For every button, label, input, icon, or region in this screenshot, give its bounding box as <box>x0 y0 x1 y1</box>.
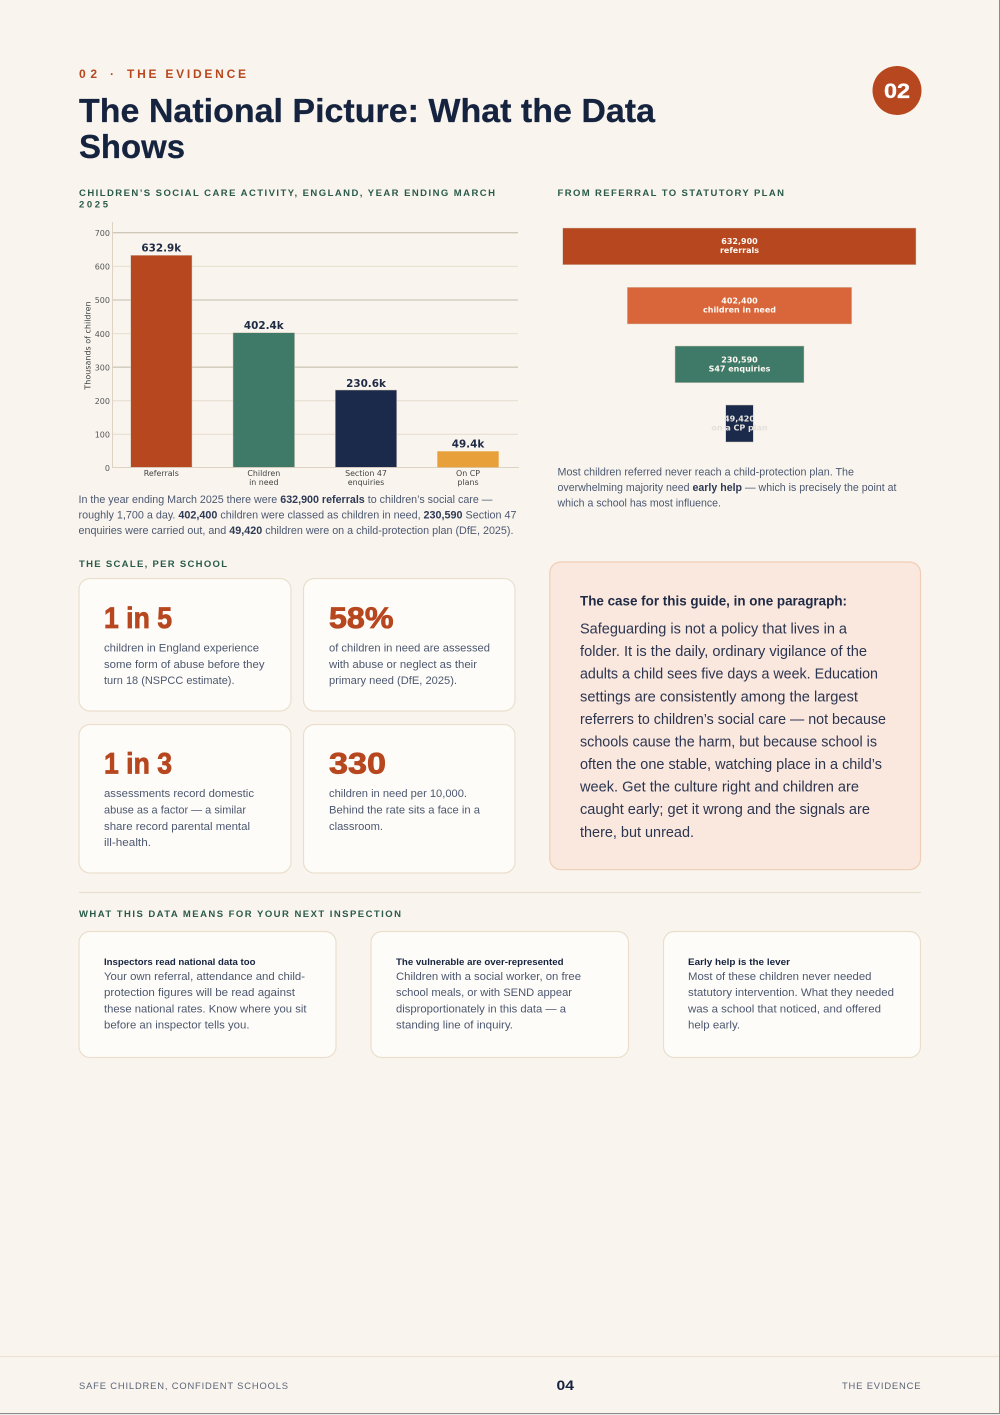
chapter badge: 02 <box>884 79 910 103</box>
funnel note: which a school has most influence. <box>557 498 721 510</box>
card: early help is the lever: Early help is the lever <box>688 957 790 968</box>
card: inspectors read national data: Inspectors read national data too <box>104 957 256 968</box>
stat card: 1 in 3: abuse as a factor — a similar <box>104 804 246 816</box>
stat card: 1 in 5: some form of abuse before they <box>104 659 265 671</box>
funnel note <box>557 466 897 510</box>
card: early help is the lever <box>664 932 920 1058</box>
funnel chart: 402,400 <box>721 296 758 306</box>
scale heading: THE SCALE, PER SCHOOL <box>79 559 227 570</box>
callout: the case for this guide <box>550 562 920 870</box>
bar chart: 402.4k <box>244 320 285 332</box>
bar chart caption: roughly 1,700 a day. 402,400 children were classed as children in need, 230,590 Section 47 <box>78 510 517 522</box>
stat card: 1 in 5: children in England experience <box>104 642 259 654</box>
card: the vulnerable are over-represented: disproportionately in this data — a <box>396 1003 566 1015</box>
bar chart caption: enquiries were carried out, and 49,420 children were on a child-protection plan (DfE, 2025). <box>78 525 514 537</box>
bar chart: Children <box>247 469 280 478</box>
stat card: 330: Behind the rate sits a face in a <box>329 804 480 816</box>
bar chart: 49.4k <box>452 438 485 450</box>
stat card: 330: classroom. <box>329 821 383 833</box>
funnel chart: referrals <box>720 246 759 255</box>
bar chart: 0 <box>105 464 110 473</box>
funnel heading: FROM REFERRAL TO STATUTORY PLAN <box>558 188 784 199</box>
stat card: 1 in 3 <box>79 724 291 873</box>
stat card: 58%: 58% <box>329 602 394 635</box>
card: early help is the lever: help early. <box>688 1020 740 1032</box>
stat card: 58% <box>304 578 515 711</box>
stat card: 1 in 5: 1 in 5 <box>104 602 172 635</box>
stat card: 330 <box>304 724 515 873</box>
card: inspectors read national data <box>79 932 336 1058</box>
bar chart: 632.9k <box>141 242 182 254</box>
inspection heading: WHAT THIS DATA MEANS FOR YOUR NEXT INSPECTION <box>79 909 401 920</box>
panel: funnel section <box>557 188 916 510</box>
callout paragraph: Safeguarding is not a policy that lives in a <box>580 622 848 638</box>
callout paragraph: adults a child sees five days a week. Education <box>580 667 878 683</box>
callout paragraph: caught early; get it wrong and the signals are <box>580 802 870 818</box>
stat card: 330: 330 <box>329 748 386 780</box>
bar chart caption <box>78 494 517 537</box>
panel: inspection implications <box>79 909 920 1058</box>
callout paragraph: folder. It is the daily, ordinary vigilance of the <box>580 644 867 660</box>
bar chart: 700 <box>95 229 110 238</box>
bar chart caption: In the year ending March 2025 there were 632,900 referrals to children’s social care — <box>78 494 493 506</box>
bar chart <box>84 222 519 487</box>
callout paragraph <box>579 622 886 841</box>
card: the vulnerable are over-represented: Children with a social worker, on free <box>396 971 581 983</box>
bar chart: enquiries <box>348 478 384 487</box>
bar chart: 300 <box>95 363 110 372</box>
section kicker: THE EVIDENCE <box>127 67 246 81</box>
bar chart: Thousands of children <box>84 301 92 391</box>
bar chart heading: 2025 <box>79 200 109 210</box>
funnel note: Most children referred never reach a child-protection plan. The <box>558 466 854 478</box>
section kicker: 02 <box>79 67 97 81</box>
funnel chart: on a CP plan <box>711 424 768 432</box>
title: Shows <box>79 129 185 166</box>
bar chart: plans <box>457 478 479 487</box>
bar chart: On CP <box>456 469 480 478</box>
stat card: 1 in 5 <box>79 578 291 711</box>
stat card: 58%: primary need (DfE, 2025). <box>329 675 457 687</box>
card: the vulnerable are over-represented: school meals, or with SEND appear <box>396 987 572 999</box>
funnel chart <box>563 228 916 442</box>
section kicker: · <box>110 67 114 81</box>
footer: 04 <box>556 1378 575 1393</box>
callout paragraph: week. Get the culture right and children are <box>579 780 859 796</box>
callout heading: The case for this guide, in one paragraph: <box>580 592 847 608</box>
stat card: 1 in 3: 1 in 3 <box>104 748 172 780</box>
funnel chart: S47 enquiries <box>709 364 771 374</box>
title: The National Picture: What the Data <box>79 93 655 130</box>
stat card: 58%: of children in need are assessed <box>329 642 490 654</box>
bar chart: Referrals <box>144 469 179 478</box>
card: inspectors read national data: Your own referral, attendance and child- <box>104 971 305 983</box>
footer <box>0 1356 999 1393</box>
title <box>79 93 655 166</box>
chapter badge <box>872 66 922 115</box>
panel: the scale per school <box>79 559 515 873</box>
stat card: 1 in 5: turn 18 (NSPCC estimate). <box>104 675 234 687</box>
card: inspectors read national data: these national rates. Know where you sit <box>104 1003 306 1015</box>
callout paragraph: often the one stable, watching place in a child’s <box>580 757 882 773</box>
funnel note: overwhelming majority need early help — which is precisely the point at <box>558 482 897 494</box>
card: early help is the lever: was a school that noticed, and offered <box>687 1003 881 1015</box>
card: the vulnerable are over-represented: The vulnerable are over-represented <box>396 957 564 968</box>
bar chart heading <box>79 188 495 210</box>
callout paragraph: schools cause the harm, but because school is <box>580 734 877 750</box>
bar chart: 200 <box>95 397 110 406</box>
bar chart heading: CHILDREN’S SOCIAL CARE ACTIVITY, ENGLAND, YEAR ENDING MARCH <box>79 188 495 199</box>
funnel chart: children in need <box>703 306 776 314</box>
bar chart: in need <box>249 478 279 487</box>
bar chart: 230.6k <box>346 378 387 390</box>
bar chart: 500 <box>95 296 110 305</box>
footer: SAFE CHILDREN, CONFIDENT SCHOOLS <box>79 1380 288 1391</box>
panel: bar chart section <box>78 188 519 537</box>
funnel chart: 632,900 <box>721 237 758 246</box>
callout paragraph: there, but unread. <box>580 825 694 841</box>
stat card: 330: children in need per 10,000. <box>329 788 467 800</box>
card: the vulnerable are over-represented: standing line of inquiry. <box>396 1020 513 1032</box>
callout paragraph: referrers to children’s social care — not because <box>580 712 886 728</box>
stat card: 1 in 3: assessments record domestic <box>104 788 255 800</box>
footer: THE EVIDENCE <box>842 1380 920 1391</box>
card: inspectors read national data: before an inspector tells you. <box>104 1020 250 1032</box>
card: early help is the lever: Most of these children never needed <box>688 971 872 983</box>
funnel chart: 230,590 <box>721 356 758 364</box>
bar chart: 400 <box>95 330 110 339</box>
bar chart: Section 47 <box>345 469 387 478</box>
callout paragraph: settings are consistently among the largest <box>580 689 858 705</box>
card: early help is the lever: statutory intervention. What they needed <box>688 987 894 999</box>
bar chart: 600 <box>95 263 110 272</box>
stat card: 1 in 3: share record parental mental <box>104 821 250 833</box>
stat card: 1 in 3: ill-health. <box>104 837 151 849</box>
card: inspectors read national data: protection figures will be read against <box>104 987 295 999</box>
funnel chart: 49,420 <box>724 414 755 424</box>
stat card: 58%: with abuse or neglect as their <box>328 659 477 671</box>
card: the vulnerable are over-represented <box>371 932 628 1058</box>
bar chart: 100 <box>95 431 110 440</box>
